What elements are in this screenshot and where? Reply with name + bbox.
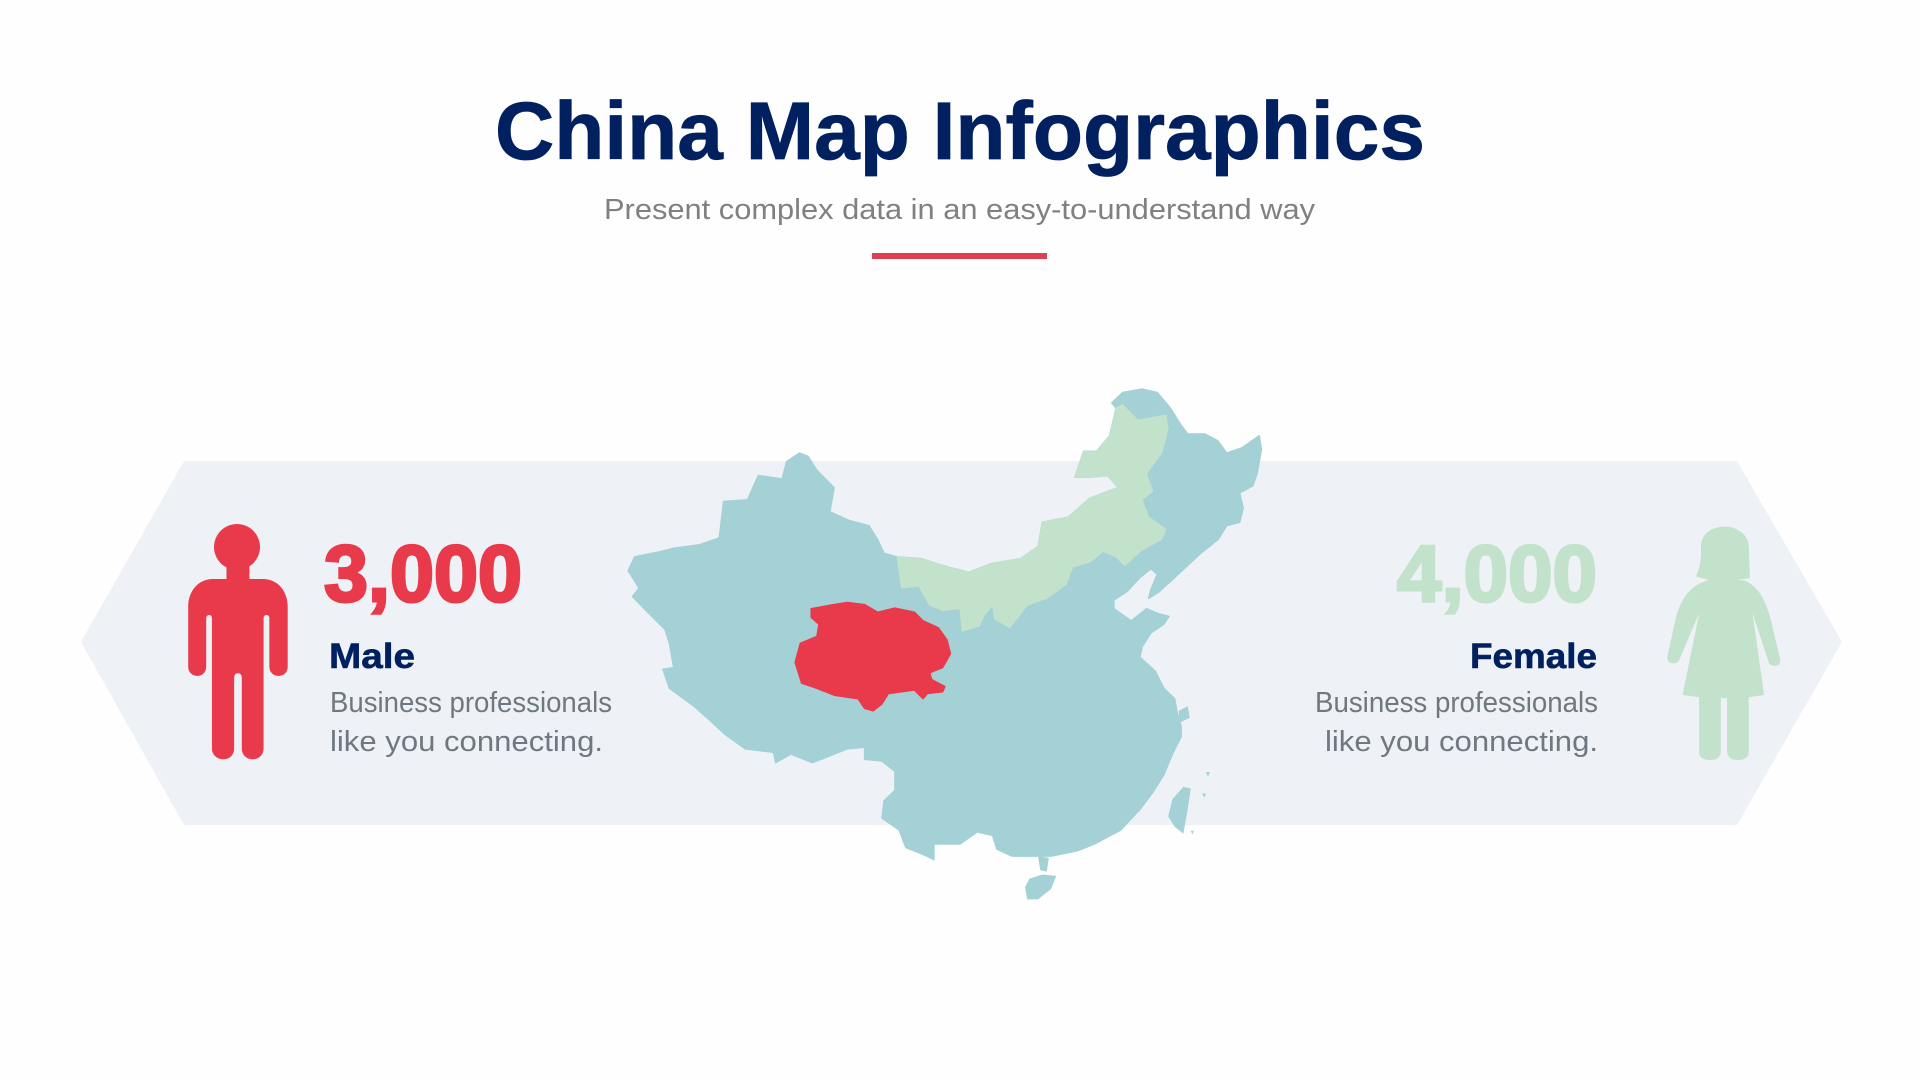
heading: male: Male [329, 637, 415, 676]
description: female: Business professionals [1315, 687, 1598, 719]
icon: female figure [1667, 527, 1780, 760]
description: male: Business professionals [330, 687, 612, 719]
map: red highlighted region [795, 603, 950, 711]
map: green northern region [897, 405, 1168, 631]
icon: male figure [188, 524, 288, 759]
description: male: like you connecting. [330, 726, 603, 758]
description: female: like you connecting. [1325, 726, 1598, 758]
map: base territory [628, 389, 1261, 860]
stat: 3,000: 3,000 [324, 529, 522, 618]
stat: 4,000: 4,000 [1397, 529, 1597, 618]
description: male [330, 687, 612, 758]
panel: female [1315, 527, 1780, 760]
subtitle: Present complex data in an easy-to-understand way [604, 194, 1316, 226]
header [495, 86, 1425, 259]
title underline accent [872, 253, 1047, 259]
description: female [1315, 687, 1598, 758]
title: China Map Infographics [495, 86, 1425, 177]
map of China [628, 389, 1261, 899]
map: islands [1025, 706, 1210, 899]
heading: female: Female [1470, 637, 1597, 676]
panel: male [188, 524, 612, 759]
panel: hexagon band [81, 461, 1842, 825]
